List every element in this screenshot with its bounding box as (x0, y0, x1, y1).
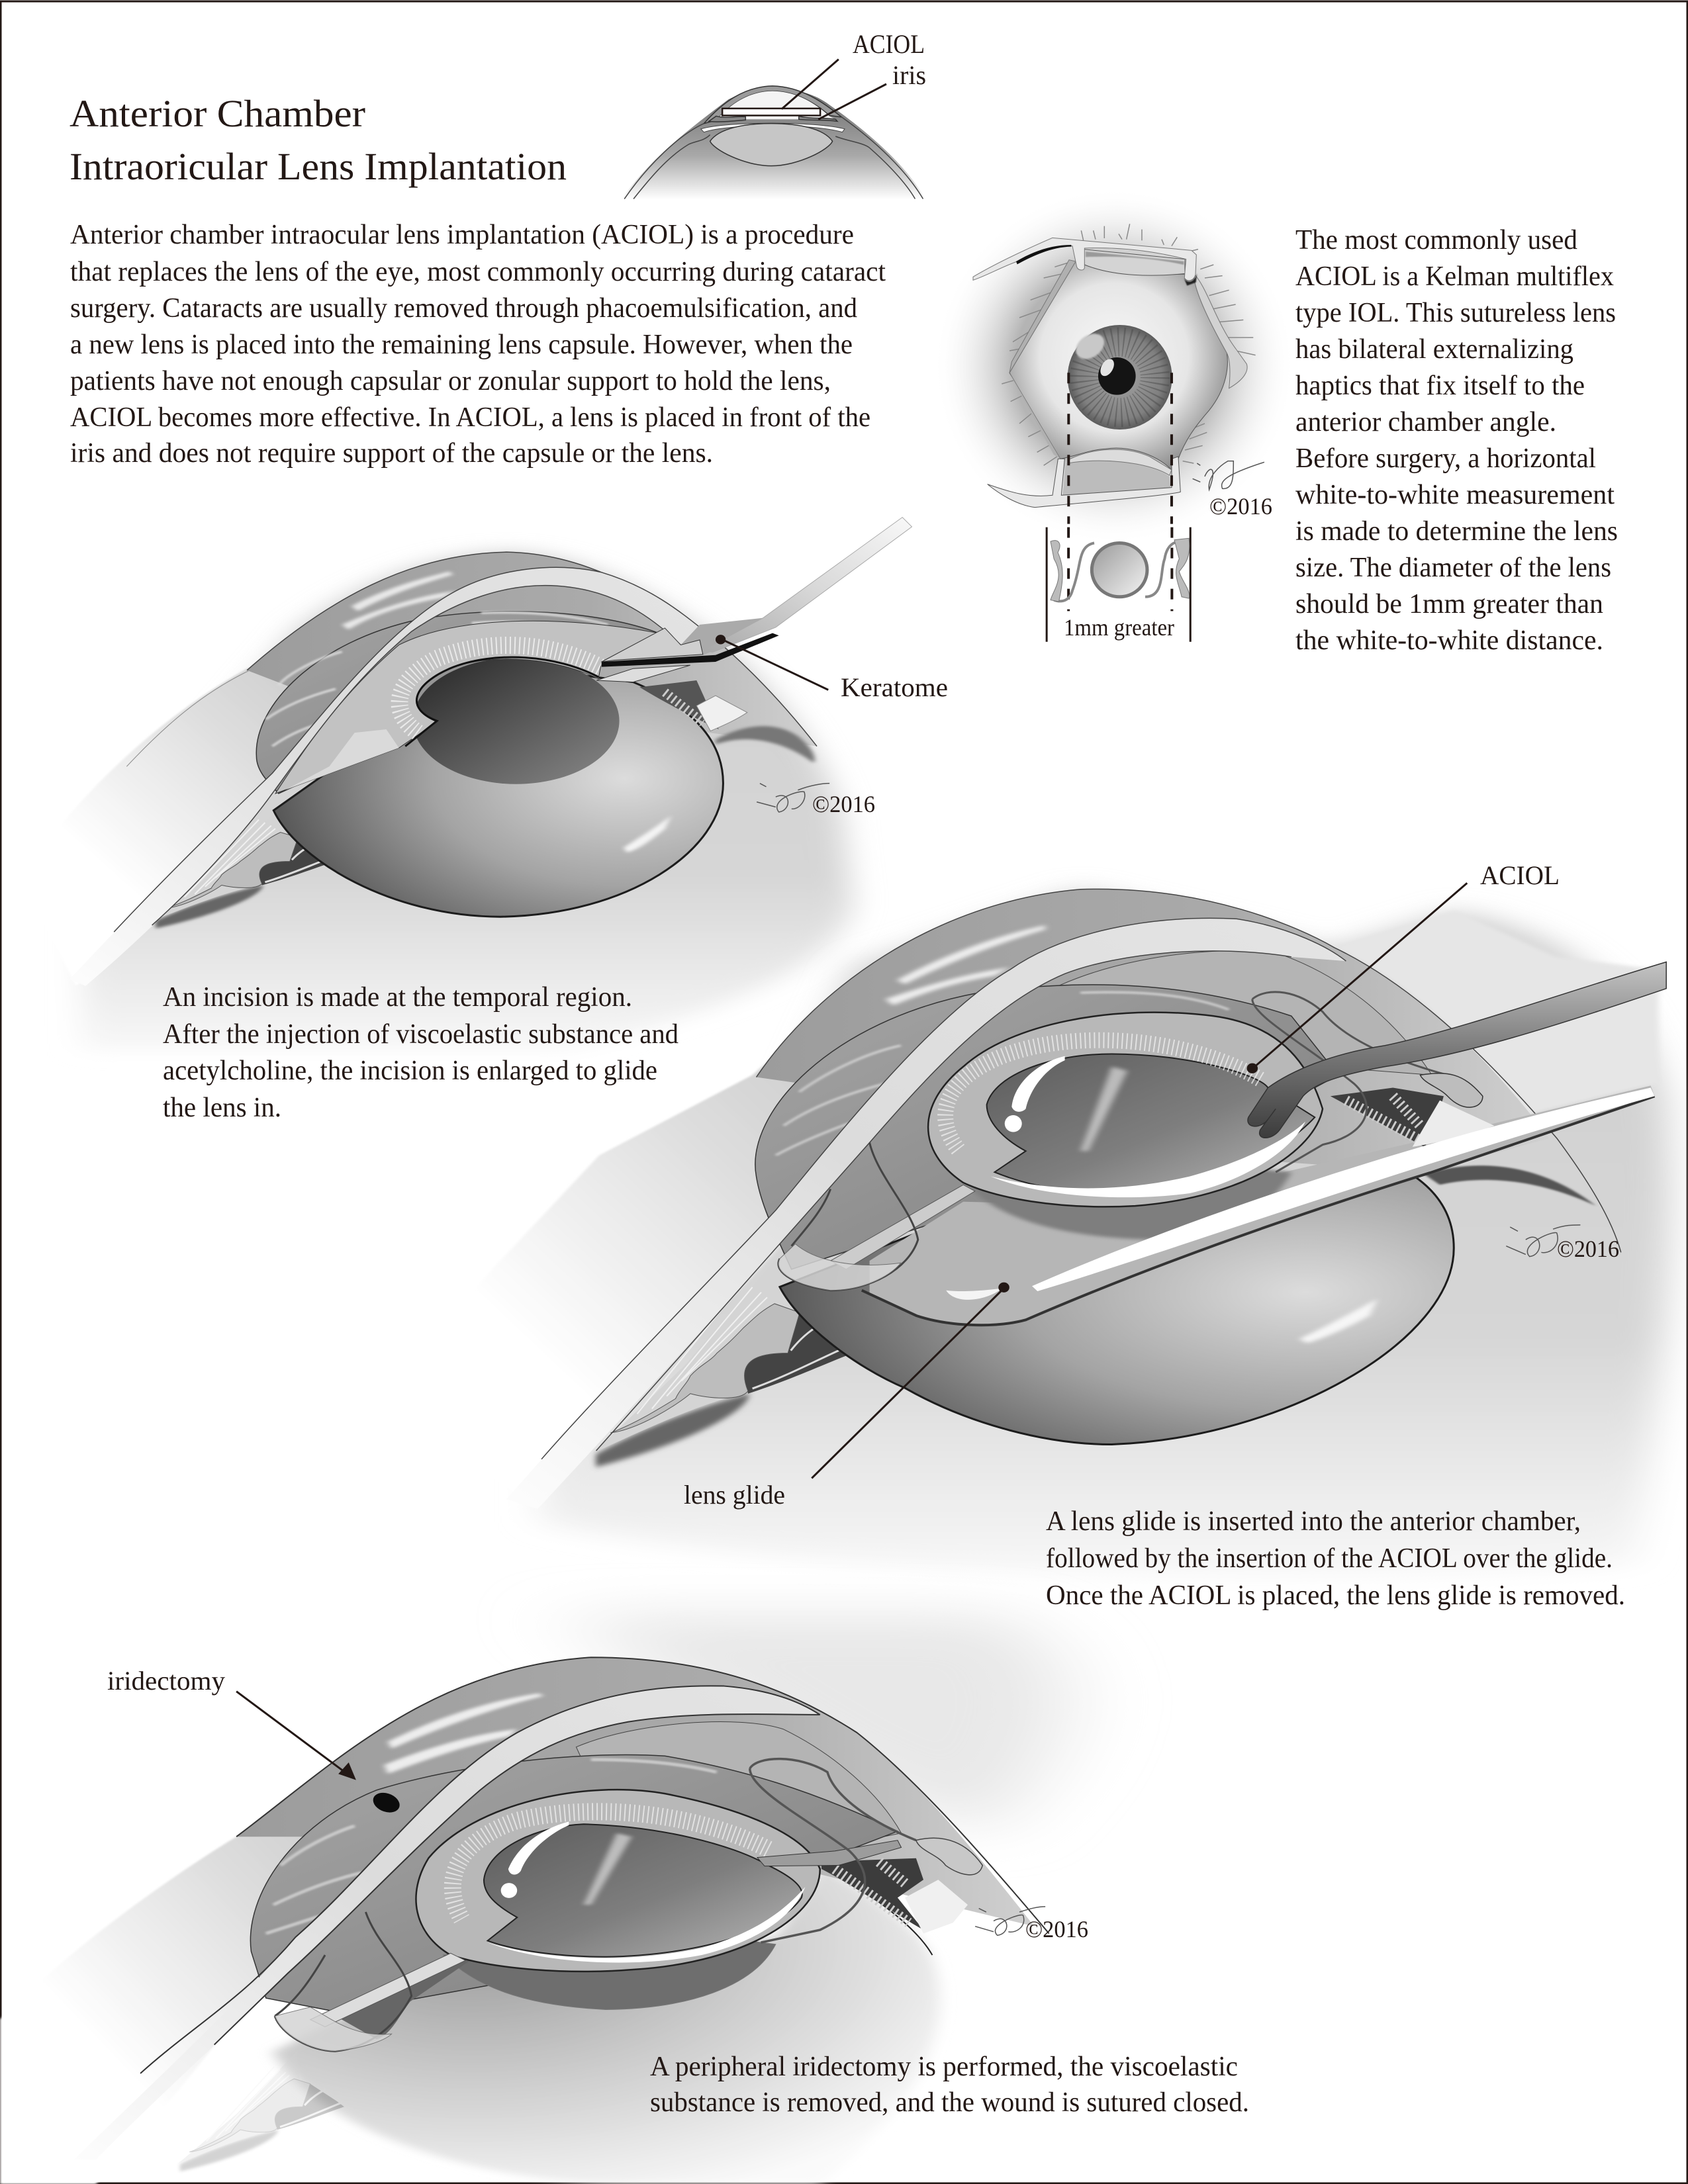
ciliary block (821, 1858, 923, 1930)
haptic bottom loop (275, 1912, 412, 2051)
pupil edge (405, 657, 598, 747)
illustration: step 1 incision (19, 518, 912, 1050)
lens specular (1299, 1298, 1378, 1343)
optic beam (1080, 1067, 1127, 1151)
label: copyright: ©2016 (1209, 493, 1272, 520)
shadowed lens (444, 1930, 776, 2009)
ciliary lace: step 3 (178, 2052, 344, 2171)
band outlines (541, 918, 1346, 1459)
ciliary upper (639, 680, 719, 729)
eyeball section (622, 89, 925, 199)
ciliary stripes (835, 1862, 909, 1923)
intro paragraph: that replaces the lens of the eye, most commonly occurring during cataract (70, 257, 886, 287)
iris ring (928, 1013, 1323, 1206)
fading lens sphere (273, 1866, 940, 2184)
iris fibres (1084, 342, 1155, 412)
upper background (561, 1614, 1068, 1837)
label: 1mm greater: 1mm greater (1064, 614, 1174, 641)
glide tip (757, 1841, 902, 1866)
caption: step 3 (650, 2052, 1249, 2118)
intro paragraph: ACIOL becomes more effective. In ACIOL, a lens is placed in front of the (70, 402, 870, 433)
text: Kelman lens description: should be 1mm greater than (1295, 589, 1603, 619)
keratome blade (602, 633, 779, 667)
pupil (413, 658, 620, 784)
label: lens glide: lens glide (684, 1480, 785, 1510)
top lid (1084, 250, 1185, 275)
diagram: frontal eye with speculum (933, 187, 1295, 545)
natural lens sphere (780, 1168, 1454, 1444)
speculum shadow (1016, 245, 1071, 264)
haptic top bulb (1421, 1073, 1483, 1107)
tool shaft (703, 518, 912, 653)
text: Kelman lens description: is made to determine the lens (1295, 516, 1618, 547)
cornea band (704, 86, 841, 124)
cornea bump (236, 1657, 1034, 1927)
diagram: eye cross-section (622, 60, 925, 199)
iris ring (275, 621, 659, 794)
lens glide body (870, 1085, 1655, 1325)
corneal flap (602, 628, 703, 662)
band outlines (114, 567, 709, 932)
caption: step 1: the lens in. (163, 1093, 281, 1123)
label: copyright: ©2016 (1557, 1236, 1619, 1262)
lens highlight (624, 815, 671, 852)
dashed guide lines (1068, 373, 1172, 524)
iris back (250, 1755, 898, 2013)
top corner shadow (1184, 273, 1197, 286)
haptic foot (275, 2007, 391, 2051)
forceps (1248, 962, 1666, 1138)
lens capsule edge (701, 123, 845, 132)
top speculum (973, 238, 1196, 281)
label: ACIOL: ACIOL (853, 29, 925, 59)
text: Kelman lens description: the white-to-white distance. (1295, 625, 1603, 656)
intro paragraph: Anterior chamber intraocular lens implantation (ACIOL) is a procedure (70, 220, 854, 250)
lens optic (484, 1824, 802, 1957)
caption: step 3: A peripheral iridectomy is performed, the viscoelastic (650, 2052, 1238, 2082)
signature (1506, 1225, 1580, 1257)
iris (1068, 325, 1172, 430)
label: copyright: ©2016 (812, 791, 875, 817)
dome outline (236, 1657, 1049, 1934)
illustration: step 2 lens glide (377, 883, 1671, 1576)
haptic foot (778, 1244, 901, 1291)
text: Kelman lens description: ACIOL is a Kelman multiflex (1295, 261, 1614, 292)
caption: step 2: Once the ACIOL is placed, the lens glide is removed. (1046, 1580, 1625, 1611)
white corneal band (74, 1686, 820, 2160)
arrow head (338, 1762, 356, 1780)
haptic top (750, 1759, 916, 1942)
text: Kelman lens description: white-to-white measurement (1295, 480, 1615, 510)
iris stripes (266, 1760, 717, 1934)
natural lens (710, 124, 833, 166)
title: Intraoricular Lens Implantation (70, 145, 567, 188)
intro paragraph (70, 220, 886, 469)
haptic top (1252, 992, 1448, 1172)
iris stripes (266, 612, 608, 747)
cornea bump (756, 889, 1549, 1172)
corneal highlights (342, 571, 456, 630)
white corneal band (70, 567, 709, 986)
iris glow (1071, 328, 1109, 364)
label: iridectomy: iridectomy (107, 1666, 225, 1696)
inner chamber (576, 1722, 902, 1851)
haptics (1054, 541, 1186, 601)
iris ring (416, 1790, 820, 1972)
lens edge (821, 1866, 932, 1955)
bottom speculum (988, 457, 1180, 508)
highlight dot (501, 1883, 517, 1898)
signature (1193, 461, 1264, 490)
left upper lid strip (1009, 260, 1076, 373)
bottom lid (1068, 449, 1172, 475)
width brackets (1047, 527, 1190, 642)
upper optic highlight (1011, 1056, 1065, 1112)
leader dot glide (998, 1283, 1009, 1293)
haptic bottom loop (778, 1142, 918, 1291)
lens glide leader (812, 1289, 1004, 1479)
text: Kelman lens description: The most commonly used (1295, 225, 1577, 255)
iris fibres (945, 1040, 1260, 1151)
label: copyright: ©2016 (1025, 1916, 1088, 1942)
caption: step 2: A lens glide is inserted into the anterior chamber, (1046, 1506, 1581, 1537)
right upper wall (1335, 911, 1658, 1117)
right lid (1194, 273, 1247, 388)
signature (757, 784, 829, 812)
text: Kelman lens description: haptics that fix itself to the (1295, 371, 1585, 401)
cornea bump (247, 552, 817, 747)
iris lower shine (285, 729, 399, 790)
eye opening (1009, 261, 1227, 470)
intro paragraph: surgery. Cataracts are usually removed through phacoemulsification, and (70, 293, 857, 324)
glide edge (862, 1096, 1655, 1325)
dome outline (247, 552, 817, 747)
caption: step 1: acetylcholine, the incision is enlarged to glide (163, 1056, 657, 1086)
dome outline (756, 889, 1621, 1252)
glide strip under band (831, 1185, 975, 1269)
leader dot (716, 635, 726, 644)
tissue background (82, 552, 852, 1050)
ciliary stripes upper (665, 692, 703, 723)
haptic feet (1051, 538, 1190, 602)
intro paragraph: iris and does not require support of the capsule or the lens. (70, 438, 713, 469)
right white tissue (1413, 1101, 1495, 1147)
caption: step 1 (163, 982, 679, 1123)
glide highlight small (946, 1289, 1002, 1300)
lower highlight (488, 1887, 805, 1962)
left skin (377, 974, 932, 1497)
text: Kelman lens description: type IOL. This sutureless lens (1295, 298, 1616, 328)
left lower lid strip (1009, 373, 1060, 459)
bright glide strip (1032, 1088, 1655, 1291)
white corneal band (506, 918, 1346, 1509)
iris fibres (399, 645, 600, 733)
optic beam (584, 1833, 632, 1905)
iris fibres (453, 1811, 769, 1919)
ACIOL bar (722, 109, 820, 115)
text: Kelman lens description: size. The diameter of the lens (1295, 553, 1611, 583)
halo shadow (933, 187, 1295, 545)
anterior chamber (707, 91, 839, 122)
corner shadow (1424, 1165, 1596, 1206)
diagram: lens sizing (1047, 527, 1190, 642)
ciliary lace: step 2 (593, 1257, 853, 1467)
label: iris: iris (892, 60, 926, 90)
title (70, 92, 567, 188)
bottom retractor inset (1062, 461, 1170, 495)
iris back (256, 612, 659, 794)
lens optic (987, 1054, 1315, 1193)
pupil shadow (971, 1160, 1291, 1240)
iris back (755, 985, 1338, 1269)
intro paragraph: patients have not enough capsular or zonular support to hold the lens, (70, 366, 831, 396)
left skin (0, 1754, 414, 2184)
caption: step 1: An incision is made at the temporal region. (163, 982, 632, 1013)
iridectomy arrow (236, 1692, 348, 1774)
text: Kelman lens description (1295, 225, 1618, 656)
iris pieces (709, 116, 837, 122)
natural lens sphere (273, 665, 723, 917)
label: ACIOL: ACIOL (1480, 860, 1560, 890)
illustration: step 3 iridectomy (0, 1614, 1068, 2184)
glide shadow wedge (332, 1955, 473, 2039)
right white tissue (905, 1880, 968, 1934)
ciliary block upper (1331, 1088, 1444, 1147)
caption: step 2 (1046, 1506, 1625, 1611)
intro paragraph: a new lens is placed into the remaining lens capsule. However, when the (70, 330, 853, 360)
skin silhouette (126, 668, 254, 766)
glide fragment (310, 1953, 465, 2026)
eyelashes (1002, 224, 1256, 465)
sclera outline (624, 117, 923, 199)
text: Kelman lens description: Before surgery, a horizontal (1295, 443, 1596, 474)
haptic top bulb (916, 1838, 982, 1875)
corneal highlights (384, 1693, 543, 1774)
caption: step 2: followed by the insertion of the ACIOL over the glide. (1046, 1543, 1613, 1574)
caption: step 1: After the injection of viscoelastic substance and (163, 1019, 679, 1050)
band outlines (140, 1686, 820, 2073)
iridectomy hole (369, 1792, 404, 1814)
left skin (19, 641, 405, 986)
leader lines (782, 60, 886, 119)
inner chamber (1010, 950, 1432, 1075)
iris highlight (1098, 357, 1117, 379)
title: Anterior Chamber (70, 92, 365, 135)
ACIOL leader (1252, 883, 1467, 1069)
iris stripes (776, 992, 1229, 1156)
intraocular lens (1092, 543, 1147, 597)
upper highlight (508, 1821, 569, 1874)
pupil (1098, 357, 1136, 395)
ciliary stripes upper (1346, 1096, 1421, 1140)
top lid lash shade (1086, 251, 1184, 265)
corneal highlights (885, 925, 1045, 1005)
label: Keratome: Keratome (841, 672, 948, 702)
keratome blade lower (596, 665, 690, 682)
ciliary lace: step 1 (154, 805, 335, 929)
leader dot ACIOL (1247, 1064, 1258, 1073)
ciliary white (696, 696, 747, 731)
dashed lines continued (1068, 527, 1172, 611)
tool neck (680, 618, 776, 655)
text: Kelman lens description: has bilateral externalizing (1295, 334, 1573, 365)
caption: step 3: substance is removed, and the wound is sutured closed. (650, 2087, 1249, 2118)
lower optic highlight (990, 1122, 1305, 1197)
leader: keratome (725, 641, 828, 690)
text: Kelman lens description: anterior chamber angle. (1295, 407, 1556, 437)
right edge shadow (716, 726, 814, 763)
tissue background (541, 889, 1671, 1576)
signature (975, 1907, 1045, 1935)
highlight dot (1005, 1115, 1022, 1132)
